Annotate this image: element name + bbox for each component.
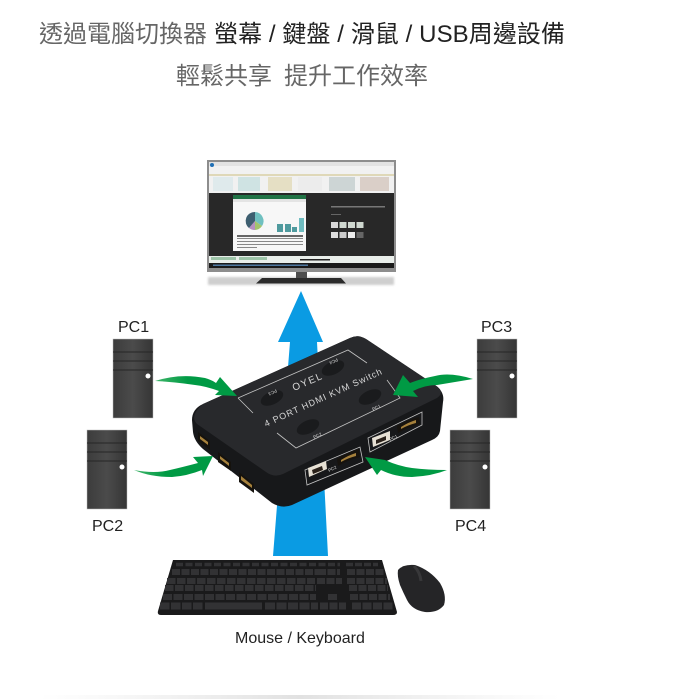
box printing: 4 PORT HDMI KVM Switch: [263, 367, 383, 429]
panel outlines: [238, 350, 422, 485]
label: PC3: PC3: [481, 319, 512, 336]
label: PC4: PC4: [455, 518, 486, 535]
keyboard: [158, 560, 397, 615]
title: 透過電腦切換器: [39, 21, 207, 48]
box printing: OYEL: [291, 371, 324, 394]
monitor: [207, 160, 396, 285]
box printing: PC2: [327, 464, 338, 473]
title: 提升工作效率: [284, 63, 428, 90]
bottom shadow line: [40, 695, 560, 699]
label: PC1: PC1: [118, 319, 149, 336]
mouse: [398, 565, 445, 612]
title: 螢幕 / 鍵盤 / 滑鼠 / USB周邊設備: [214, 21, 565, 48]
title: [39, 21, 565, 90]
green arrow: PC4: [365, 457, 447, 477]
box printing: PC1: [388, 433, 399, 442]
box printing: PC3: [267, 388, 278, 397]
box printing: [263, 357, 399, 473]
tower: PC3: [477, 339, 517, 418]
KVM switch box: [192, 336, 443, 507]
title: 輕鬆共享: [176, 63, 272, 90]
box printing: PC1: [371, 403, 382, 412]
green arrow: PC1: [155, 376, 237, 396]
green arrow: PC2: [134, 456, 213, 477]
label: mouse and keyboard: Mouse / Keyboard: [235, 630, 365, 647]
box printing: PC4: [328, 357, 339, 366]
blue arrow up: [273, 291, 328, 556]
tower: PC2: [87, 430, 127, 509]
tower: PC1: [113, 339, 153, 418]
chart in screen: [237, 212, 304, 248]
label: PC2: PC2: [92, 518, 123, 535]
tower: PC4: [450, 430, 490, 509]
buttons: [258, 357, 384, 438]
box printing: PC2: [312, 431, 323, 440]
green arrow: PC3: [393, 375, 473, 397]
ports: [308, 461, 327, 477]
